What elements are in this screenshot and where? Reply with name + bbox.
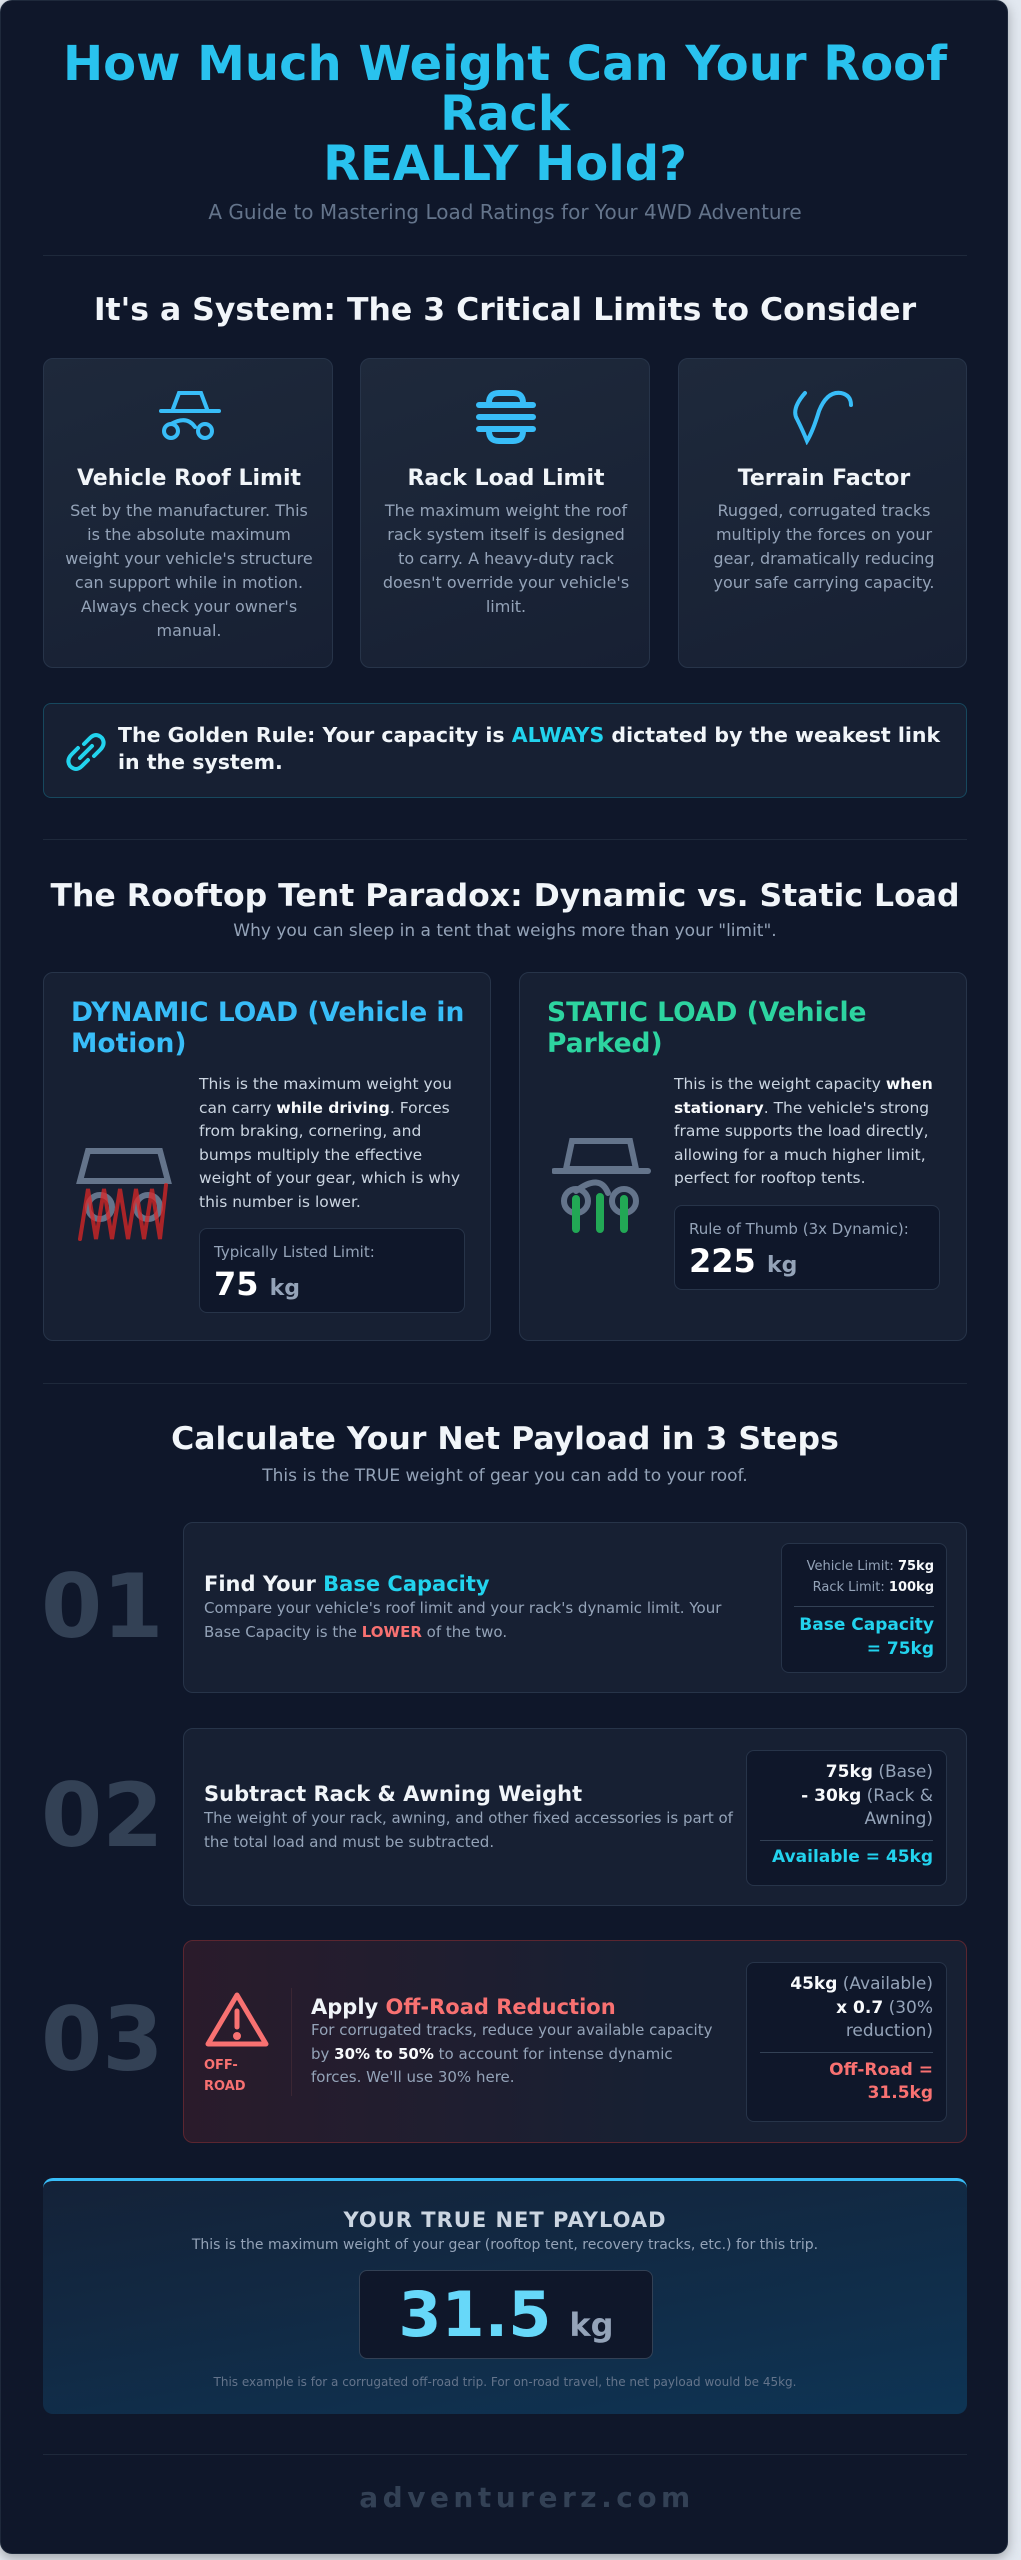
heading: 3 critical limits: It's a System: The 3 Critical Limits to Consider [94,292,916,328]
calc: off-road: 45kg (Available) [790,1974,933,1994]
calc: available: Available = 45kg [772,1846,933,1866]
text: step 1: Compare your vehicle's roof limit and your rack's dynamic limit. Your Base Capacity is the LOWER of the two. [204,1599,721,1641]
panel: step 1 [183,1522,967,1693]
calc: available: - 30kg (Rack & Awning) [801,1786,933,1829]
panel: static load [519,972,967,1341]
title: REALLY Hold? [323,136,687,192]
calc: base capacity: Vehicle Limit: 75kg [807,1559,934,1574]
stat: 225 kg [674,1205,940,1290]
heading: rooftop tent paradox: The Rooftop Tent Paradox: Dynamic vs. Static Load [50,878,960,914]
calc: off-road [746,1962,947,2122]
stat: 31.5 kg: 31.5 kg [398,2278,614,2351]
text: rack load limit: Rack Load Limit [407,466,605,491]
panel: true net payload [43,2178,967,2414]
panel: step 2 [183,1728,967,1906]
subtitle: A Guide to Mastering Load Ratings for Your 4WD Adventure [208,200,802,224]
text: step 2: The weight of your rack, awning, and other fixed accessories is part of the total load and must be subtracted. [204,1809,733,1851]
text: dynamic description: This is the maximum weight you can carry while driving. Forces from braking, cornering, and bumps multiply the effective weight of your gear, which is why this number is lower. [199,1075,460,1210]
text: vehicle roof limit: Set by the manufacturer. This is the absolute maximum weight your vehicle's structure can support while in motion. Always check your owner's manual. [65,501,313,640]
calc: off-road: Off-Road = 31.5kg [829,2060,933,2103]
icon: warning: OFF- [204,2058,238,2073]
calc: base capacity [781,1543,947,1673]
heading: dynamic: DYNAMIC LOAD (Vehicle in Motion) [71,997,464,1059]
footnote: This example is for a corrugated off-road trip. For on-road travel, the net payload would be 45kg. [214,2375,796,2389]
stat: 225 kg: Rule of Thumb (3x Dynamic): [689,1220,909,1238]
panel: terrain factor [678,358,967,668]
title [63,36,948,192]
text: step 2 [204,1782,734,1851]
text: step 1 [204,1572,722,1641]
heading: payload: YOUR TRUE NET PAYLOAD [343,2208,667,2232]
panel: vehicle roof limit [43,358,333,668]
title: How Much Weight Can Your Roof [63,36,947,92]
icon: wave [793,390,853,445]
title: Rack [440,86,570,142]
stat: 31.5 kg [359,2270,653,2359]
text: vehicle roof limit: Vehicle Roof Limit [77,466,301,491]
text: step 1: Find Your Base Capacity [204,1572,490,1596]
text: golden rule: The Golden Rule: Your capacity is ALWAYS dictated by the weakest link in the system. [118,723,940,774]
text: static description: This is the weight capacity when stationary. The vehicle's strong frame supports the load directly, allowing for a much higher limit, perfect for rooftop tents. [674,1075,933,1187]
subheading: Why you can sleep in a tent that weighs more than your "limit". [233,921,777,941]
text: terrain factor: Terrain Factor [738,466,910,491]
icon: car [159,391,221,440]
subheading: This is the TRUE weight of gear you can add to your roof. [262,1466,748,1486]
stat: 225 kg: 225 kg [689,1242,797,1280]
icon: link [66,733,106,771]
text: step 3: Apply Off-Road Reduction [311,1995,616,2019]
number: 03: 03 [41,1988,163,2091]
icon: rack [476,390,536,444]
stat: 75 kg: 75 kg [214,1265,300,1303]
text: rack load limit: The maximum weight the roof rack system itself is designed to carry. A heavy-duty rack doesn't override your vehicle's limit. [383,501,629,616]
number: 02: 02 [41,1764,163,1867]
panel: rack load limit [360,358,650,668]
stat: 75 kg [199,1228,465,1313]
panel: step 3 [183,1940,967,2143]
calc: off-road: x 0.7 (30% reduction) [836,1998,933,2041]
text: payload description: This is the maximum weight of your gear (rooftop tent, recovery tracks, etc.) for this trip. [192,2237,818,2253]
icon: warning [204,1992,268,2094]
calc: available [746,1750,947,1886]
panel: dynamic load [43,972,491,1341]
number: 01: 01 [41,1555,163,1658]
heading: static: STATIC LOAD (Vehicle Parked) [547,997,867,1059]
text: step 3: For corrugated tracks, reduce your available capacity by 30% to 50% to account for intense dynamic forces. We'll use 30% here. [311,2021,712,2086]
calc: available: 75kg (Base) [826,1762,933,1782]
text: terrain factor: Rugged, corrugated tracks multiply the forces on your gear, dramatically reducing your safe carrying capacity. [713,501,935,592]
icon: car with vibration [76,1148,172,1241]
text: step 2: Subtract Rack & Awning Weight [204,1782,582,1806]
icon: warning: ROAD [204,2079,246,2094]
heading: net payload steps: Calculate Your Net Payload in 3 Steps [171,1421,839,1457]
callout: golden rule [43,703,967,798]
calc: base capacity: Rack Limit: 100kg [813,1580,934,1595]
stat: 75 kg: Typically Listed Limit: [214,1243,375,1261]
icon: parked car [552,1138,651,1233]
calc: base capacity: Base Capacity = 75kg [799,1615,934,1659]
footer: adventurerz.com [359,2481,695,2514]
